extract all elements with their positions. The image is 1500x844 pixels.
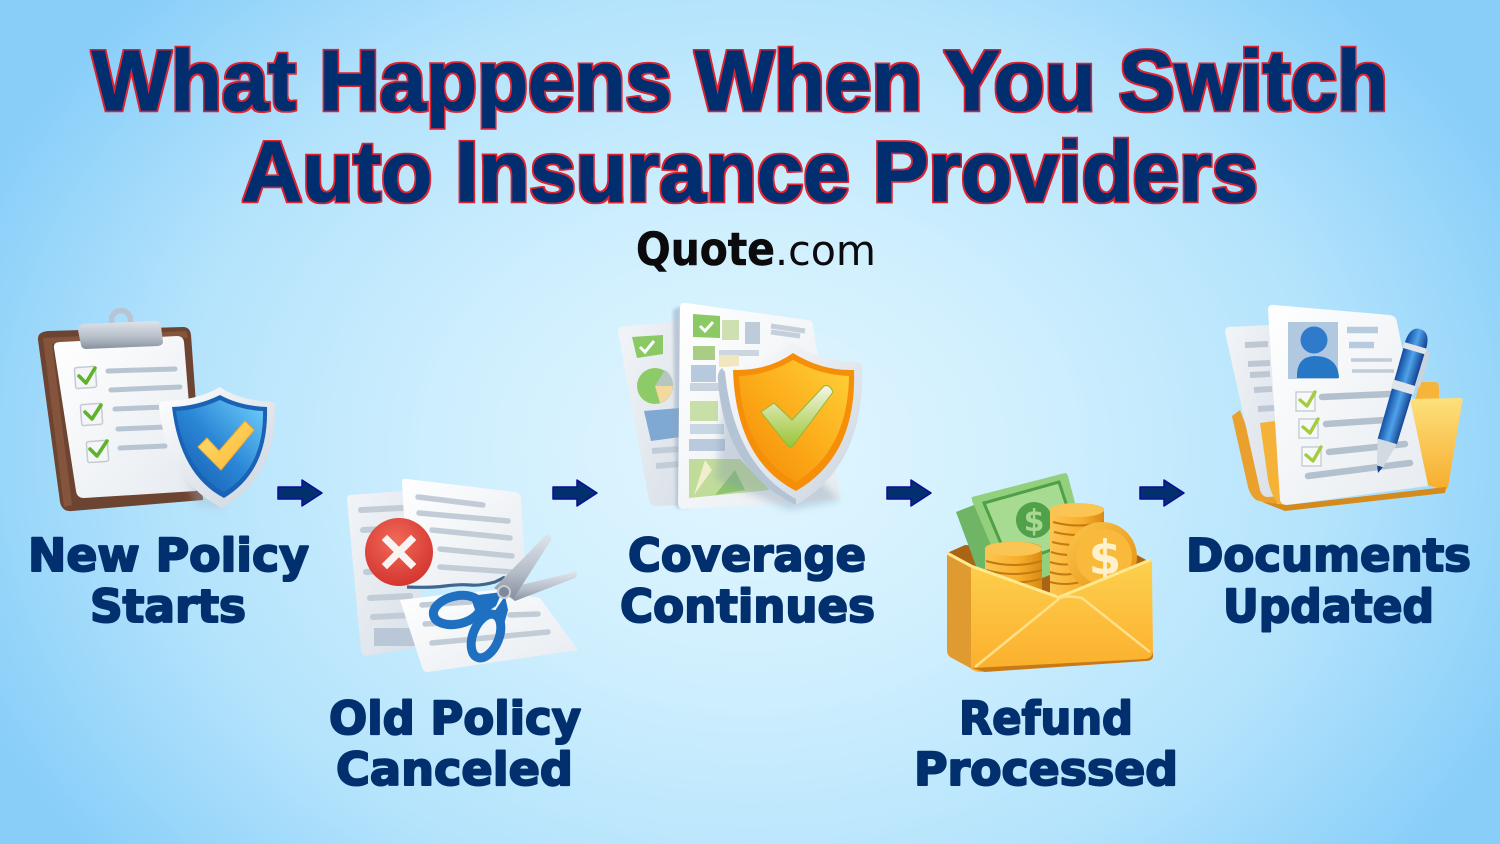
label: Documents Updated	[1186, 529, 1471, 633]
title line 1: What Happens When You Switch	[92, 34, 1388, 129]
front page blocks	[689, 314, 805, 498]
big coin	[1067, 522, 1137, 592]
checklist	[74, 366, 180, 463]
icon: cancelled document with scissors	[347, 479, 578, 672]
icon: clipboard with blue shield	[38, 310, 275, 511]
shield	[717, 342, 862, 505]
label: Documents Updated: Documents	[1186, 529, 1471, 582]
label: Coverage Continues	[620, 529, 875, 633]
label: Coverage Continues: Coverage	[628, 529, 866, 582]
front page	[1268, 305, 1429, 505]
red cancel badge	[365, 518, 433, 586]
label: Old Policy Canceled	[329, 692, 581, 796]
icon: envelope with cash and coins	[947, 473, 1153, 672]
title line 2: Auto Insurance Providers	[242, 125, 1258, 220]
torn edge	[407, 577, 505, 587]
label: Refund Processed: Refund	[959, 692, 1133, 745]
arrow 3	[887, 480, 931, 506]
logo: Quote.com	[636, 223, 876, 276]
title	[92, 34, 1388, 220]
bills	[956, 473, 1090, 590]
arrow 1	[278, 480, 322, 506]
bills: $	[1024, 504, 1044, 539]
icon: documents in folder with pen	[1225, 305, 1463, 511]
label: Coverage Continues: Continues	[620, 580, 875, 633]
portrait	[1288, 322, 1339, 379]
lower paper	[400, 590, 578, 672]
label: New Policy Starts: Starts	[90, 580, 246, 633]
arrow 4	[1140, 480, 1184, 506]
arrow 2	[553, 480, 597, 506]
coin stack left	[985, 542, 1042, 595]
label: New Policy Starts: New Policy	[28, 529, 309, 582]
label: Refund Processed	[914, 692, 1178, 796]
back page	[1225, 325, 1290, 497]
label: Old Policy Canceled: Canceled	[336, 743, 573, 796]
logo suffix .com: .com	[775, 226, 876, 275]
coin stack right	[1050, 503, 1104, 595]
label: New Policy Starts	[28, 529, 309, 633]
shield	[159, 387, 275, 508]
envelope front	[947, 553, 1153, 672]
document lines	[1296, 330, 1410, 476]
icon: documents with orange shield	[618, 303, 862, 510]
label: Documents Updated: Updated	[1223, 580, 1434, 633]
clip	[78, 310, 163, 349]
logo word Quote: Quote	[636, 223, 775, 276]
folder back	[1232, 410, 1280, 507]
label: Old Policy Canceled: Old Policy	[329, 692, 581, 745]
pen	[1367, 326, 1436, 478]
folder front	[1410, 398, 1463, 490]
scissors	[430, 535, 577, 662]
envelope back	[947, 545, 1152, 610]
big coin: $	[1089, 531, 1121, 586]
label: Refund Processed: Processed	[914, 743, 1178, 796]
back page charts	[632, 335, 680, 466]
